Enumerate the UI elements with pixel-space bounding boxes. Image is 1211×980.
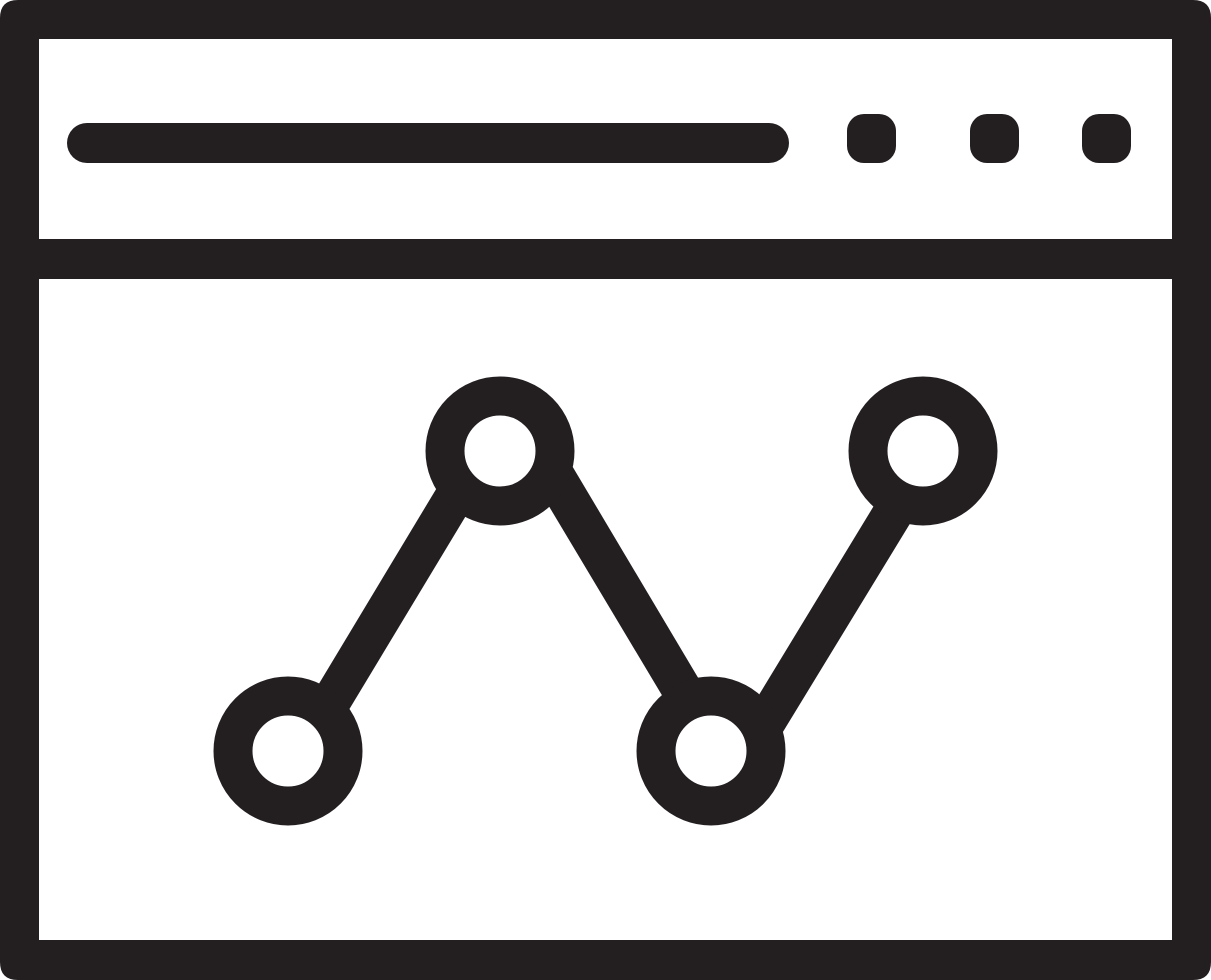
data point 2 [445,396,555,506]
data point 4 [868,396,978,506]
address bar [67,123,789,163]
chart line segments [314,459,914,740]
window control buttons [847,114,1131,163]
data point 3 [656,696,766,806]
data point 1 [233,696,343,806]
line chart [233,396,978,806]
